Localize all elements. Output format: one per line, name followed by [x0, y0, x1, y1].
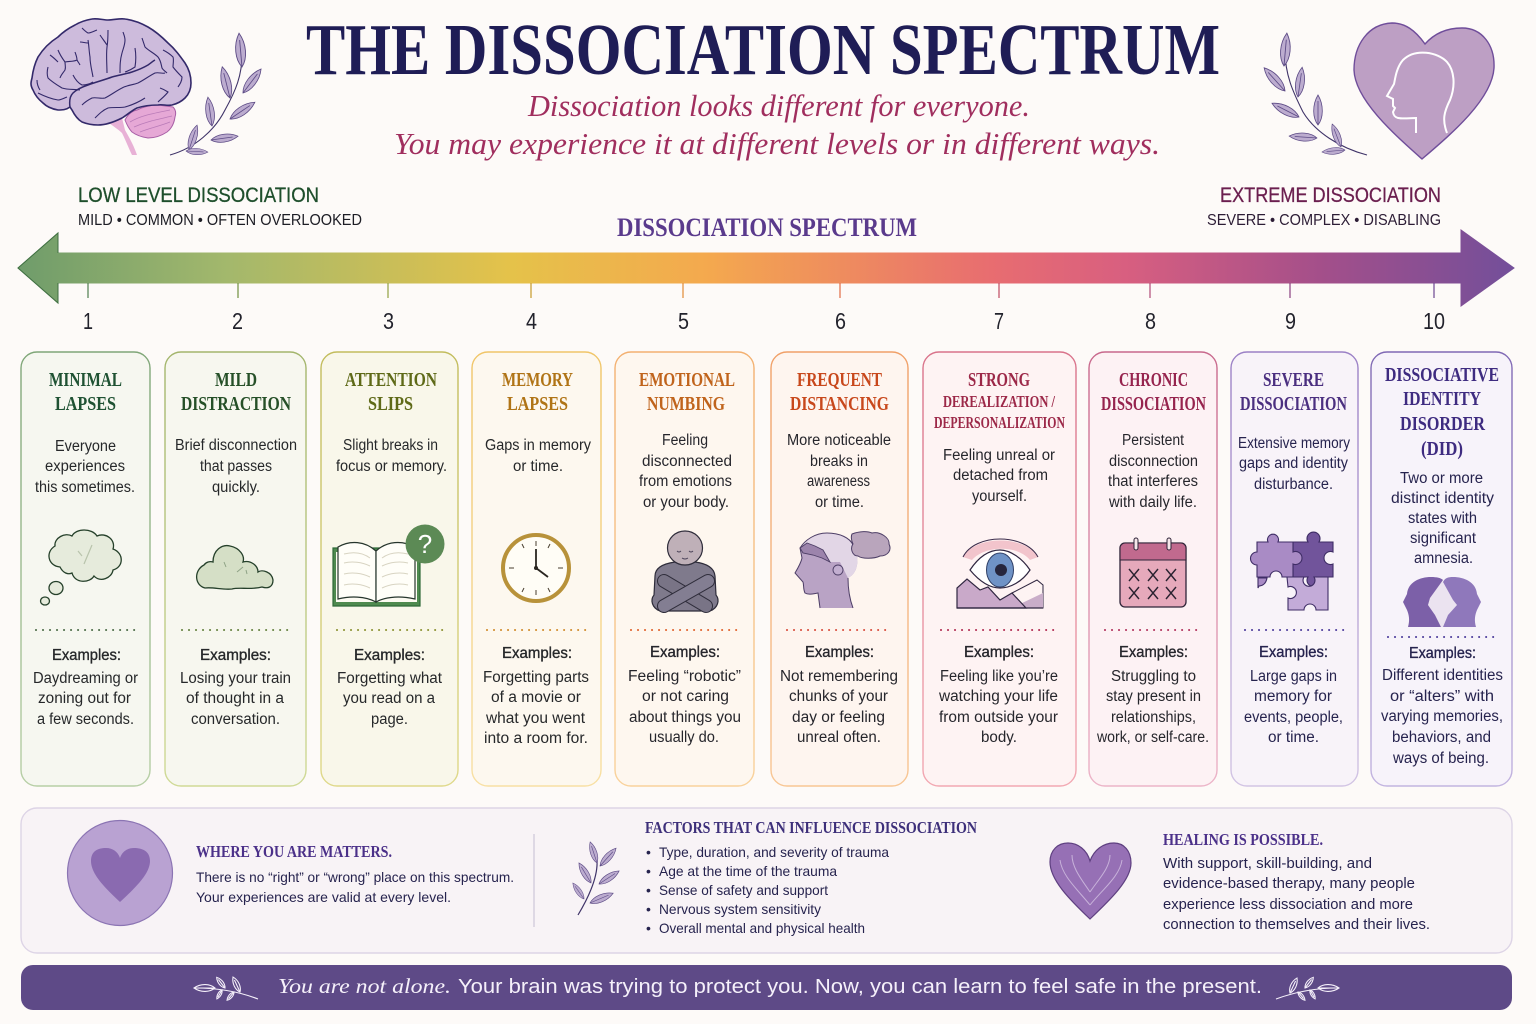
examples: Different identities — [1382, 667, 1503, 684]
examples: or “alters” with — [1390, 688, 1494, 705]
text: factors list: FACTORS THAT CAN INFLUENCE DISSOCIATION — [645, 818, 978, 837]
heading: attention slips: ATTENTION — [345, 369, 437, 391]
examples: page. — [371, 711, 408, 728]
icon: banner sprig left — [194, 976, 258, 1001]
panel: severe dissociation — [1231, 352, 1358, 786]
title: THE DISSOCIATION SPECTRUM — [306, 9, 1220, 90]
description: Feeling unreal or — [943, 447, 1055, 464]
icon: puzzle pieces — [1251, 532, 1333, 610]
examples: Feeling like you’re — [940, 668, 1058, 685]
text: banner message — [278, 974, 1262, 998]
icon: banner sprig right — [1276, 976, 1339, 1001]
icon: leaf sprig — [571, 841, 621, 915]
icon: head with drifting cloud — [795, 532, 890, 608]
scale numbers: 8 — [1145, 308, 1156, 334]
text: factors list: Nervous system sensitivity — [659, 901, 821, 917]
text: factors list: • — [646, 844, 651, 860]
low level label: LOW LEVEL DISSOCIATION — [78, 184, 319, 207]
examples: a few seconds. — [37, 711, 134, 728]
heading: memory lapses: LAPSES — [507, 393, 568, 415]
panel: minimal lapses — [21, 352, 150, 786]
examples: chunks of your — [789, 688, 888, 705]
icon: two head profiles — [1403, 577, 1481, 627]
heading: emotional numbing: NUMBING — [647, 393, 725, 415]
scale numbers: 3 — [383, 308, 394, 334]
text: where you are matters: There is no “right” or “wrong” place on this spectrum. — [196, 869, 514, 885]
examples: events, people, — [1244, 709, 1343, 726]
description — [787, 432, 891, 511]
heading: memory lapses — [502, 369, 573, 415]
examples: conversation. — [191, 711, 280, 728]
description — [485, 437, 591, 475]
scale numbers: 4 — [526, 308, 537, 334]
description: disconnection — [1109, 453, 1198, 470]
text: factors list: • — [646, 863, 651, 879]
icon: open book with question mark: ? — [418, 529, 432, 559]
description: disconnected — [642, 453, 732, 470]
icon: person hugging self — [652, 531, 718, 611]
examples: Examples: — [502, 645, 572, 662]
examples: Daydreaming or — [33, 670, 138, 687]
examples: Feeling “robotic” — [628, 668, 741, 685]
heading: strong derealization / depersonalization: DEREALIZATION / — [943, 392, 1055, 411]
description — [1108, 432, 1198, 511]
description — [1391, 470, 1494, 567]
examples — [1244, 644, 1343, 746]
icon: brain — [31, 19, 191, 155]
scale numbers: 2 — [232, 308, 243, 334]
panel: bottom information — [21, 808, 1512, 953]
examples: ways of being. — [1392, 750, 1489, 767]
spectrum heading: DISSOCIATION SPECTRUM — [617, 213, 917, 242]
text: factors list: • — [646, 901, 651, 917]
text: factors list: Sense of safety and support — [659, 882, 828, 898]
description: or time. — [513, 458, 563, 475]
scale numbers: 7 — [994, 308, 1004, 334]
description: from emotions — [639, 473, 732, 490]
description: detached from — [953, 467, 1048, 484]
examples: Examples: — [200, 647, 271, 664]
text: healing is possible: connection to themselves and their lives. — [1163, 916, 1430, 933]
description: experiences — [45, 458, 125, 475]
examples: stay present in — [1106, 688, 1201, 705]
examples: watching your life — [938, 688, 1058, 705]
description — [175, 437, 297, 496]
banner: closing message — [21, 965, 1512, 1010]
examples: into a room for. — [484, 730, 588, 747]
panel: strong derealization — [923, 352, 1076, 786]
examples: Examples: — [1409, 645, 1476, 662]
description: that passes — [200, 458, 272, 475]
scale numbers: 9 — [1285, 308, 1296, 334]
description: Brief disconnection — [175, 437, 297, 454]
text: factors list: Age at the time of the trauma — [659, 863, 837, 879]
heading: dissociative identity disorder: DISSOCIATIVE — [1385, 364, 1499, 386]
heading: mild distraction: MILD — [215, 369, 257, 391]
text: factors list — [645, 818, 978, 936]
examples — [33, 647, 138, 728]
description: yourself. — [972, 488, 1027, 505]
description — [639, 432, 732, 511]
examples — [180, 647, 291, 728]
heading: strong derealization / depersonalization — [934, 369, 1065, 432]
examples: memory for — [1254, 688, 1332, 705]
heading: dissociative identity disorder: (DID) — [1421, 438, 1463, 460]
description: that interferes — [1108, 473, 1198, 490]
description: awareness — [807, 473, 870, 490]
description: More noticeable — [787, 432, 891, 449]
examples: relationships, — [1111, 709, 1196, 726]
description: gaps and identity — [1239, 455, 1348, 472]
heading: attention slips — [345, 369, 437, 415]
heading: frequent distancing — [790, 369, 889, 415]
panel: emotional numbing — [615, 352, 754, 786]
icon: calendar with crosses — [1120, 538, 1186, 607]
description: Persistent — [1122, 432, 1185, 449]
heading: severe dissociation: SEVERE — [1263, 369, 1324, 391]
icon: cloud — [197, 546, 273, 589]
examples: what you went — [485, 710, 586, 727]
examples — [938, 644, 1058, 746]
heading: severe dissociation — [1240, 369, 1347, 415]
spectrum arrow — [18, 230, 1514, 306]
examples: varying memories, — [1381, 708, 1503, 725]
description: amnesia. — [1414, 550, 1473, 567]
heading: strong derealization / depersonalization: DEPERSONALIZATION — [934, 413, 1065, 432]
icon: heart with head profile — [1354, 23, 1494, 159]
extreme label: EXTREME DISSOCIATION — [1220, 184, 1441, 207]
description: with daily life. — [1108, 494, 1197, 511]
examples — [1096, 644, 1209, 746]
text: where you are matters — [196, 842, 514, 905]
examples: Losing your train — [180, 670, 291, 687]
scale numbers: 10 — [1423, 308, 1445, 334]
description: Slight breaks in — [343, 437, 438, 454]
subtitle: You may experience it at different levels or in different ways. — [394, 126, 1160, 161]
text: healing is possible: With support, skill-building, and — [1163, 855, 1372, 872]
text: healing is possible: evidence-based therapy, many people — [1163, 875, 1415, 892]
examples: Struggling to — [1111, 668, 1196, 685]
heading: mild distraction: DISTRACTION — [181, 393, 291, 415]
extreme label — [1207, 184, 1441, 229]
text: where you are matters: WHERE YOU ARE MATTERS. — [196, 842, 392, 861]
description: breaks in — [810, 453, 868, 470]
heading: minimal lapses — [49, 369, 122, 415]
description — [1238, 435, 1350, 493]
scale numbers: 6 — [835, 308, 846, 334]
examples — [1381, 645, 1503, 767]
heading: memory lapses: MEMORY — [502, 369, 573, 391]
icon: heart in circle — [68, 820, 172, 926]
heading: chronic dissociation: CHRONIC — [1119, 369, 1188, 391]
examples: of a movie or — [491, 689, 581, 706]
panel: dissociative identity disorder — [1371, 352, 1512, 786]
examples: or time. — [1268, 729, 1319, 746]
examples: Examples: — [805, 644, 874, 661]
icon: eye over mountains — [957, 539, 1043, 608]
heading: strong derealization / depersonalization: STRONG — [968, 369, 1030, 391]
panel: frequent distancing — [771, 352, 908, 786]
examples — [483, 645, 589, 747]
text: healing is possible: experience less dissociation and more — [1163, 896, 1413, 913]
description — [35, 438, 135, 496]
examples: Forgetting what — [337, 670, 443, 687]
examples: behaviors, and — [1392, 729, 1491, 746]
examples — [780, 644, 898, 746]
examples: Examples: — [52, 647, 121, 664]
text: where you are matters: Your experiences are valid at every level. — [196, 889, 451, 905]
examples — [628, 644, 741, 746]
examples: Forgetting parts — [483, 669, 589, 686]
description: or time. — [815, 494, 864, 511]
text: factors list: Type, duration, and severity of trauma — [659, 844, 889, 860]
text: factors list: • — [646, 882, 651, 898]
icon: left leaf sprig — [170, 33, 265, 155]
icon: textured heart — [1050, 843, 1131, 919]
extreme label: SEVERE • COMPLEX • DISABLING — [1207, 212, 1441, 229]
examples: Examples: — [1119, 644, 1188, 661]
description: or your body. — [643, 494, 729, 511]
text: factors list: • — [646, 920, 651, 936]
icon: thought cloud — [40, 530, 121, 605]
description: disturbance. — [1254, 476, 1333, 493]
description: this sometimes. — [35, 479, 135, 496]
heading: dissociative identity disorder: DISORDER — [1400, 413, 1485, 435]
heading: chronic dissociation: DISSOCIATION — [1101, 393, 1206, 415]
low level label — [78, 184, 362, 229]
examples — [337, 647, 443, 728]
text: healing is possible: HEALING IS POSSIBLE. — [1163, 830, 1323, 849]
subtitle: Dissociation looks different for everyone. — [527, 88, 1030, 123]
examples: of thought in a — [186, 690, 284, 707]
examples: zoning out for — [38, 690, 131, 707]
description: Feeling — [662, 432, 708, 449]
examples: work, or self-care. — [1096, 729, 1209, 746]
description: Extensive memory — [1238, 435, 1350, 452]
heading: severe dissociation: DISSOCIATION — [1240, 393, 1347, 415]
heading: emotional numbing — [639, 369, 735, 415]
panel: attention slips — [321, 352, 458, 786]
heading: emotional numbing: EMOTIONAL — [639, 369, 735, 391]
heading: frequent distancing: DISTANCING — [790, 393, 889, 415]
examples: Examples: — [354, 647, 425, 664]
examples: you read on a — [343, 690, 435, 707]
examples: Not remembering — [780, 668, 898, 685]
description — [336, 437, 447, 475]
heading: chronic dissociation — [1101, 369, 1206, 415]
description — [943, 447, 1055, 505]
panel: memory lapses — [472, 352, 601, 786]
text: factors list: Overall mental and physical health — [659, 920, 865, 936]
examples: or not caring — [642, 688, 729, 705]
description: Everyone — [55, 438, 116, 455]
heading: minimal lapses: LAPSES — [55, 393, 116, 415]
examples: Large gaps in — [1250, 668, 1337, 685]
examples: day or feeling — [792, 709, 885, 726]
low level label: MILD • COMMON • OFTEN OVERLOOKED — [78, 212, 362, 229]
text: banner message: Your brain was trying to protect you. Now, you can learn to feel safe in the present. — [458, 976, 1262, 998]
description: Two or more — [1400, 470, 1483, 487]
subtitle — [394, 88, 1160, 161]
icon: clock — [503, 535, 569, 601]
description: quickly. — [212, 479, 260, 496]
examples: body. — [981, 729, 1017, 746]
description: states with — [1408, 510, 1477, 527]
heading: mild distraction — [181, 369, 291, 415]
examples: usually do. — [649, 729, 719, 746]
heading: minimal lapses: MINIMAL — [49, 369, 122, 391]
scale numbers — [83, 308, 1445, 334]
icon: open book with question mark — [333, 524, 444, 606]
text: banner message: You are not alone. — [278, 974, 451, 998]
heading: dissociative identity disorder: IDENTITY — [1403, 388, 1481, 410]
panel: chronic dissociation — [1089, 352, 1217, 786]
examples: Examples: — [964, 644, 1034, 661]
description: Gaps in memory — [485, 437, 591, 454]
description: distinct identity — [1391, 490, 1494, 507]
heading: dissociative identity disorder — [1385, 364, 1499, 460]
description: significant — [1410, 530, 1477, 547]
examples: about things you — [629, 709, 741, 726]
heading: frequent distancing: FREQUENT — [797, 369, 883, 391]
examples: Examples: — [1259, 644, 1328, 661]
scale numbers: 1 — [83, 308, 93, 334]
examples: unreal often. — [797, 729, 881, 746]
examples: from outside your — [939, 709, 1058, 726]
scale numbers: 5 — [678, 308, 689, 334]
panel: mild distraction — [165, 352, 306, 786]
description: focus or memory. — [336, 458, 447, 475]
examples: Examples: — [650, 644, 720, 661]
icon: right leaf sprig — [1261, 33, 1367, 155]
heading: attention slips: SLIPS — [368, 393, 413, 415]
text: healing is possible — [1163, 830, 1430, 933]
